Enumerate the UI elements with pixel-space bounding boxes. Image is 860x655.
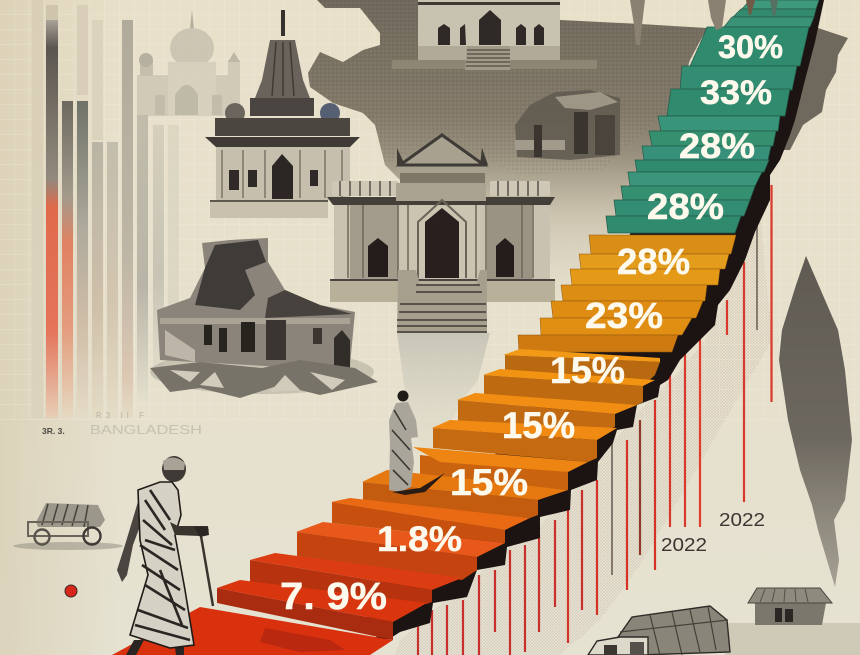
faint Bangladesh label: [42, 411, 202, 437]
step labels: 15%: [450, 462, 528, 503]
red drips and halftone: [395, 185, 772, 655]
step labels: 28%: [617, 241, 690, 282]
orange steps: [518, 235, 736, 352]
truck: [588, 606, 730, 655]
top palace: [392, 0, 597, 70]
old man with cane: [117, 456, 213, 655]
step labels: 1.8%: [377, 520, 462, 559]
year label lower: 2022: [661, 535, 707, 555]
faint Taj Mahal: [137, 10, 240, 116]
left cart: [13, 503, 123, 550]
faint Bangladesh label: 3R. 3.: [42, 426, 65, 436]
year label upper: 2022: [719, 510, 765, 530]
step labels: 23%: [585, 295, 663, 336]
step labels: 15%: [550, 350, 625, 391]
map silhouette: [308, 0, 707, 462]
step labels: 15%: [502, 405, 575, 446]
step labels: 28%: [647, 186, 724, 227]
faint Bangladesh label: BANGLADESH: [90, 423, 202, 437]
staircase shadow: [360, 0, 824, 645]
main palace: [327, 135, 555, 333]
right map teardrop: [779, 256, 852, 587]
ruined building upper right: [515, 90, 620, 160]
top small figures: [630, 0, 778, 45]
step labels: 7. 9%: [280, 576, 387, 618]
hut: [725, 588, 860, 655]
faint Bangladesh label: R3 II F: [96, 411, 148, 420]
deep orange and red steps: [112, 349, 660, 655]
step labels: 30%: [718, 29, 783, 65]
temple: [205, 10, 360, 218]
red dot: [65, 585, 77, 597]
green steps: [606, 0, 819, 233]
walking figure on stairs: [389, 390, 445, 495]
step labels: 33%: [700, 74, 772, 112]
step labels: 28%: [679, 127, 755, 166]
faded bar chart: [32, 0, 179, 418]
ruined house with debris: [150, 238, 378, 398]
step labels: [280, 29, 783, 618]
right map fragment: [780, 26, 848, 150]
